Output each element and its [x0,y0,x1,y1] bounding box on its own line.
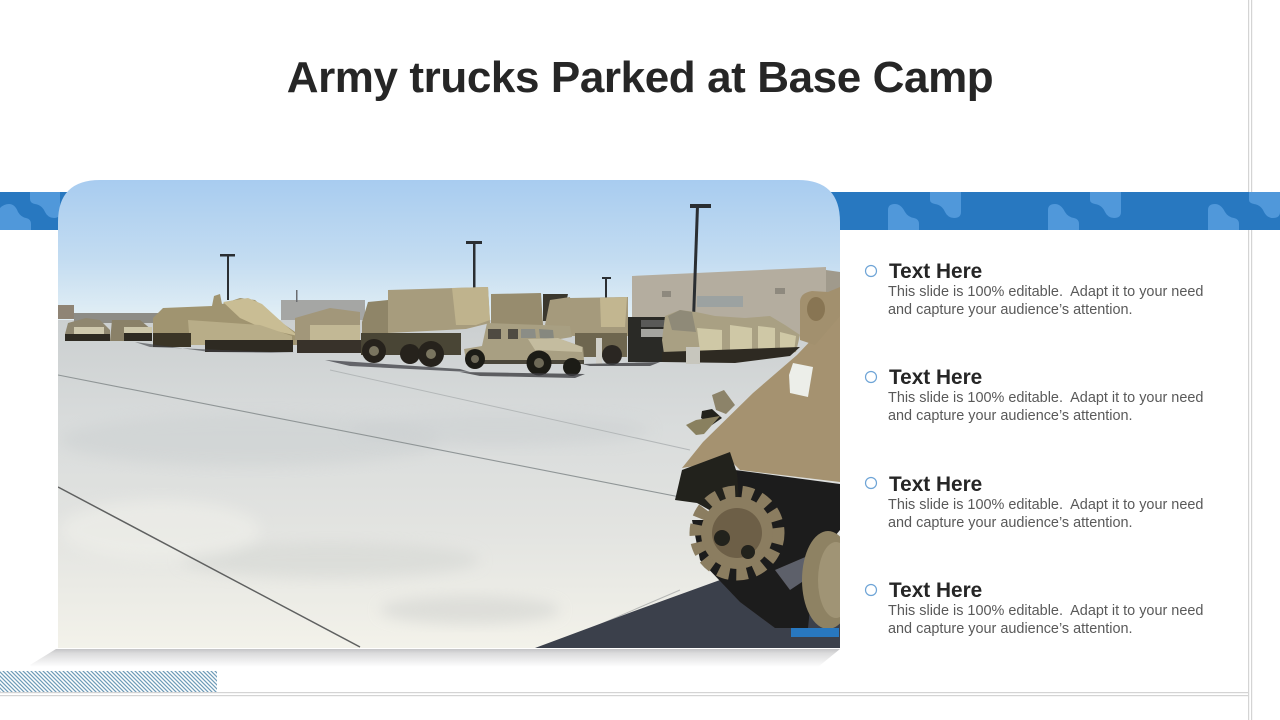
hatched strip [0,671,217,692]
list item 4 [888,579,1203,637]
list item 1: Text Here [889,260,982,283]
list item 4: Text Here [889,579,982,602]
sticker [789,363,813,397]
photo: army vehicles parked at base camp [58,180,854,648]
cargo truck 1 [361,287,490,367]
hull [682,310,840,482]
title: Army trucks Parked at Base Camp [287,53,993,102]
list item 2: Text Here [889,366,982,389]
small vehicles left [65,318,152,341]
sky [58,180,840,325]
lamp posts [220,204,711,312]
concrete ground [58,320,840,648]
turret [800,287,840,345]
list item 4: This slide is 100% editable. Adapt it to your need and capture your audience’s attention. [888,603,1203,637]
distant buildings [58,267,840,335]
cargo truck 3 [570,297,628,365]
foreground vehicle shadow [535,580,840,648]
blue band with pattern [0,192,1280,230]
humvee [464,323,584,376]
road wheel [802,531,840,628]
dark truck [628,317,667,362]
tracks dark body [692,470,840,628]
list item 2: This slide is 100% editable. Adapt it to your need and capture your audience’s attention. [888,390,1203,424]
bracket [686,390,735,435]
list item 2 [888,366,1203,424]
row of armoured vehicles [662,310,800,364]
list item 3: This slide is 100% editable. Adapt it to your need and capture your audience’s attention. [888,497,1203,531]
cargo truck 2 [491,293,570,326]
second armoured vehicle [295,308,363,353]
photo shadow [30,649,840,667]
list item 3: Text Here [889,473,982,496]
tarped armoured vehicle [153,294,298,352]
list item 1: This slide is 100% editable. Adapt it to your need and capture your audience’s attention. [888,284,1203,318]
list item 3 [888,473,1203,531]
blue tag [791,628,839,637]
black fender [675,452,736,510]
foreground armoured vehicle [675,287,854,629]
list markers [866,266,876,596]
sprocket [696,492,778,574]
list item 1 [888,260,1203,318]
ground shadows [135,342,660,378]
